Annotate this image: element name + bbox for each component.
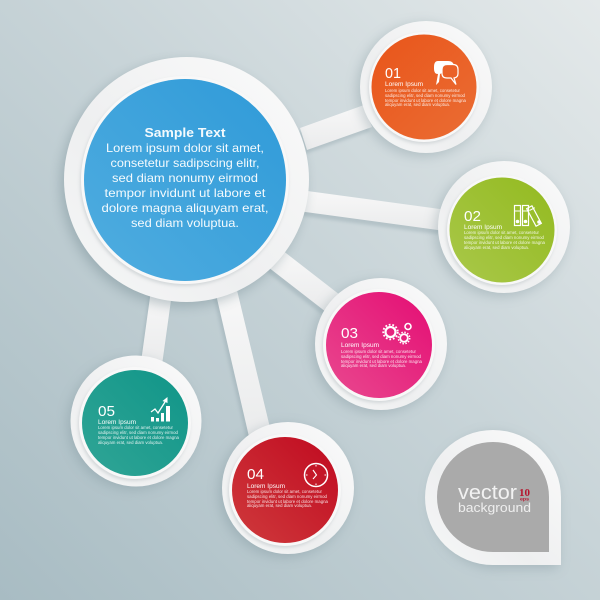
teardrop badge [425,430,561,568]
text 01: 01 [385,65,401,82]
vector background label: background [458,501,531,515]
circle 02 green [435,161,570,296]
text 03: Lorem ipsum dolor sit amet, consetetur [341,349,417,354]
circle 05 teal [68,356,202,489]
text 04: tempor invidunt ut labore et dolore magna [247,499,329,504]
main circle text: sed diam nonumy eirmod [112,171,258,185]
text 01: tempor invidunt ut labore et dolore magna [385,98,467,103]
text 04: Lorem Ipsum [247,483,285,490]
teardrop grey panel [437,442,549,552]
text 02: tempor invidunt ut labore et dolore magna [464,240,546,245]
text 03: aliquyam erat, sed diam voluptua. [341,363,406,368]
text 05: 05 [98,403,115,420]
text 05 [98,403,180,445]
text 04 [247,466,329,508]
text 04: Lorem ipsum dolor sit amet, consetetur [247,489,323,494]
connector bars [139,105,447,445]
text 05: tempor invidunt ut labore et dolore magna [98,435,180,440]
text 02: 02 [464,208,481,225]
main circle text: sed diam voluptua. [131,216,239,230]
main circle text: tempor invidunt ut labore et [104,186,266,200]
text 01: aliquyam erat, sed diam voluptua. [385,102,450,107]
vector background label: vector [458,482,517,504]
text 01: Lorem ipsum dolor sit amet, consetetur [385,88,461,93]
text 01 [385,65,467,107]
icon: speech bubbles [434,61,458,85]
text 05: Lorem ipsum dolor sit amet, consetetur [98,425,174,430]
text 01: Lorem Ipsum [385,81,423,88]
text 05: sadipscing elitr, sed diam nonumy eirmod [98,430,179,435]
icon: growth chart [151,397,170,422]
main circle text [102,126,268,230]
icon: binders [514,206,541,226]
text 01: sadipscing elitr, sed diam nonumy eirmod [385,93,466,98]
text 04: 04 [247,466,264,483]
icon: clock [304,464,328,486]
text 02: Lorem Ipsum [464,224,502,231]
vector background label: eps [520,496,530,502]
text 02: aliquyam erat, sed diam voluptua. [464,245,529,250]
circle 03 pink [312,278,447,413]
text 04: aliquyam erat, sed diam voluptua. [247,503,312,508]
circle 01 orange [357,21,492,156]
main circle text: consetetur sadipscing elitr, [110,156,260,170]
text 05: Lorem Ipsum [98,419,136,426]
main circle [61,57,309,306]
text 04: sadipscing elitr, sed diam nonumy eirmod [247,494,328,499]
main circle text: Lorem ipsum dolor sit amet, [106,141,264,155]
text 03 [341,325,423,368]
text 02: Lorem ipsum dolor sit amet, consetetur [464,230,540,235]
main circle text: Sample Text [144,126,226,140]
vector background label [458,482,531,515]
text 05: aliquyam erat, sed diam voluptua. [98,440,163,445]
text 03: 03 [341,325,358,342]
icon: gears [383,324,411,344]
text 02: sadipscing elitr, sed diam nonumy eirmod [464,235,545,240]
text 03: Lorem Ipsum [341,342,379,349]
main circle text: dolore magna aliquyam erat, [102,201,268,215]
vector background label: 10 [519,488,530,499]
teardrop white frame [425,430,561,565]
text 02 [464,208,546,250]
circle 04 red [219,422,354,557]
text 03: tempor invidunt ut labore et dolore magna [341,359,423,364]
text 03: sadipscing elitr, sed diam nonumy eirmod [341,354,422,359]
